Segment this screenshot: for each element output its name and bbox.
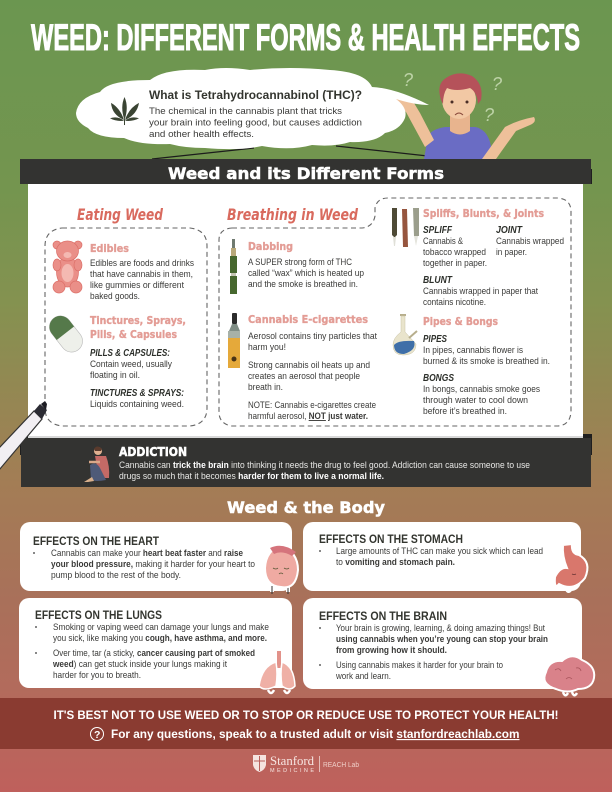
text: pipes and bongs: In pipes, cannabis flower is bbox=[423, 344, 523, 355]
card: effects on the lungs: harder for you to breath. bbox=[53, 669, 141, 680]
text: dabbing and e-cigarettes: Cannabis E-cigarettes bbox=[248, 313, 368, 326]
text: dabbing and e-cigarettes: called “wax” which is heated up bbox=[248, 267, 364, 278]
heading: eating weed: Eating Weed bbox=[77, 205, 163, 224]
text: spliffs, blunts, joints: tobacco wrapped bbox=[423, 246, 486, 257]
icon: sad seated person bbox=[84, 446, 109, 482]
header bar: weed and its different forms bbox=[20, 159, 591, 184]
text: pipes and bongs: Pipes & Bongs bbox=[423, 315, 498, 328]
card: effects on the stomach bbox=[303, 522, 581, 591]
text: spliffs, blunts, joints: Spliffs, Blunts, & Joints bbox=[423, 207, 544, 220]
text: pipes and bongs: through water to cool down bbox=[423, 394, 528, 405]
heading: weed and the body: Weed & the Body bbox=[227, 498, 386, 517]
card: effects on the heart: Cannabis can make your heart beat faster and raise bbox=[51, 547, 243, 558]
card: effects on the brain: Using cannabis makes it harder for your brain to bbox=[336, 659, 503, 670]
card: effects on the brain: from growing how it should. bbox=[336, 644, 447, 655]
text: eating weed: that have cannabis in them, bbox=[90, 268, 193, 279]
footer message bbox=[54, 710, 558, 741]
text: spliffs, blunts, joints: contains nicotine. bbox=[423, 296, 486, 307]
icon: sad stomach bbox=[555, 544, 587, 592]
icon: marker pen bbox=[0, 401, 47, 476]
text: spliffs, blunts, joints bbox=[423, 207, 564, 307]
text: dabbing and e-cigarettes: Strong cannabis oil heats up and bbox=[248, 359, 370, 370]
text: pipes and bongs: before it’s breathed in. bbox=[423, 405, 507, 416]
text: spliffs, blunts, joints: Cannabis wrapped in paper that bbox=[423, 285, 538, 296]
logo: stanford medicine reach lab: Stanford bbox=[270, 754, 315, 768]
footer message: For any questions, speak to a trusted adult or visit stanfordreachlab.com bbox=[111, 729, 520, 741]
text: pipes and bongs bbox=[423, 315, 550, 416]
card: effects on the brain bbox=[303, 598, 582, 689]
card: effects on the brain: Your brain is growing, learning, & doing amazing things! But bbox=[336, 622, 545, 633]
addiction bar: drugs so much that it becomes harder for them to live a normal life. bbox=[119, 470, 384, 481]
illustration: confused person: ? bbox=[492, 74, 502, 94]
addiction bar: ADDICTION bbox=[119, 445, 187, 459]
text: spliffs, blunts, joints: JOINT bbox=[496, 225, 523, 236]
text: eating weed: like gummies or different bbox=[90, 279, 184, 290]
illustration: confused person: ? bbox=[484, 105, 494, 125]
text: eating weed: Contain weed, usually bbox=[90, 358, 172, 369]
heading: breathing in weed: Breathing in Weed bbox=[227, 205, 358, 224]
icon: sad brain bbox=[544, 656, 594, 695]
icon: question circle bbox=[90, 728, 104, 741]
dashed box: breathing in weed bbox=[219, 198, 571, 426]
icon: pill capsule bbox=[45, 311, 87, 357]
text: pipes and bongs: PIPES bbox=[423, 334, 447, 345]
text: spliffs, blunts, joints: together in paper. bbox=[423, 257, 487, 268]
icon: bong bbox=[393, 314, 417, 355]
speech cloud bbox=[76, 68, 429, 149]
text: eating weed bbox=[90, 242, 194, 409]
icon: sad heart bbox=[265, 546, 298, 594]
card: effects on the lungs: EFFECTS ON THE LUNGS bbox=[35, 610, 162, 622]
text: eating weed: PILLS & CAPSULES: bbox=[90, 348, 170, 359]
card: effects on the brain: EFFECTS ON THE BRAIN bbox=[319, 611, 447, 623]
cloud text: what is THC bbox=[149, 88, 362, 139]
text: dabbing and e-cigarettes bbox=[248, 240, 377, 421]
text: dabbing and e-cigarettes: NOTE: Cannabis e-cigarettes create bbox=[248, 399, 376, 410]
icon: question circle: ? bbox=[94, 729, 100, 741]
card: effects on the stomach: to vomiting and stomach pain. bbox=[336, 556, 455, 567]
text: spliffs, blunts, joints: Cannabis & bbox=[423, 235, 464, 246]
text: eating weed: Edibles bbox=[90, 242, 129, 255]
text: spliffs, blunts, joints: in paper. bbox=[496, 246, 527, 257]
card: effects on the stomach: EFFECTS ON THE STOMACH bbox=[319, 534, 463, 546]
text: eating weed: Pills, & Capsules bbox=[90, 328, 177, 341]
text: eating weed: Liquids containing weed. bbox=[90, 398, 184, 409]
projector strings bbox=[152, 146, 455, 159]
card: effects on the brain: work and learn. bbox=[335, 670, 391, 681]
text: dabbing and e-cigarettes: A SUPER strong form of THC bbox=[248, 256, 352, 267]
card: effects on the lungs: Smoking or vaping weed can damage your lungs and make bbox=[53, 621, 269, 632]
text: spliffs, blunts, joints: BLUNT bbox=[423, 275, 453, 286]
cloud text: what is THC: The chemical in the cannabis plant that tricks bbox=[149, 105, 342, 116]
text: spliffs, blunts, joints: Cannabis wrapped bbox=[496, 235, 564, 246]
text: dabbing and e-cigarettes: harm you! bbox=[248, 341, 286, 352]
card: effects on the brain: using cannabis when you’re young can stop your brain bbox=[336, 633, 548, 644]
text: spliffs, blunts, joints: SPLIFF bbox=[423, 225, 453, 236]
text: eating weed: TINCTURES & SPRAYS: bbox=[90, 388, 184, 399]
cloud text: what is THC: your brain into feeling good, but causes addiction bbox=[149, 116, 362, 128]
icon: cannabis leaf bbox=[110, 97, 139, 125]
text: dabbing and e-cigarettes: Dabbing bbox=[248, 240, 293, 253]
icon: spliff, blunt, joint bbox=[392, 208, 419, 247]
text: dabbing and e-cigarettes: breath in. bbox=[248, 381, 283, 392]
icon: e-cigarette bbox=[228, 313, 240, 368]
card: effects on the heart: EFFECTS ON THE HEART bbox=[33, 536, 159, 548]
text: dabbing and e-cigarettes: Aerosol contains tiny particles that bbox=[248, 330, 377, 341]
addiction bar bbox=[21, 438, 591, 487]
header bar: weed and its different forms: Weed and its Different Forms bbox=[168, 164, 444, 183]
card: effects on the heart: your blood pressure, making it harder for your heart to bbox=[51, 558, 255, 569]
card: effects on the lungs: weed) can get stuck inside your lungs making it bbox=[52, 658, 227, 669]
logo: stanford medicine reach lab: MEDICINE bbox=[270, 768, 314, 774]
text: eating weed: floating in oil. bbox=[90, 369, 140, 380]
logo: stanford medicine reach lab: REACH Lab bbox=[323, 760, 359, 769]
card: effects on the heart bbox=[20, 522, 292, 591]
logo: stanford medicine reach lab bbox=[253, 754, 359, 774]
text: pipes and bongs: BONGS bbox=[423, 373, 454, 384]
footer message: IT'S BEST NOT TO USE WEED OR TO STOP OR REDUCE USE TO PROTECT YOUR HEALTH! bbox=[54, 710, 558, 722]
text: pipes and bongs: In bongs, cannabis smoke goes bbox=[423, 383, 540, 394]
icon: gummy bear bbox=[53, 241, 82, 293]
addiction bar: Cannabis can trick the brain into thinking it needs the drug to feel good. Addiction can cause someone to use bbox=[119, 459, 530, 470]
text: eating weed: Edibles are foods and drinks bbox=[90, 257, 194, 268]
cloud text: what is THC: and other health effects. bbox=[149, 128, 254, 139]
card: effects on the lungs: Over time, tar (a sticky, cancer causing part of smoked bbox=[53, 647, 255, 658]
icon: sad lungs bbox=[259, 651, 295, 693]
card: effects on the lungs: you sick, like making you cough, have asthma, and more. bbox=[53, 632, 267, 643]
text: dabbing and e-cigarettes: creates an aerosol that people bbox=[248, 370, 360, 381]
card: effects on the heart: pump blood to the rest of the body. bbox=[51, 569, 181, 580]
header bar tabs bbox=[20, 169, 592, 455]
illustration: confused person: ? bbox=[403, 70, 413, 90]
text: dabbing and e-cigarettes: and the smoke is breathed in. bbox=[248, 278, 358, 289]
cloud text: what is THC: What is Tetrahydrocannabinol (THC)? bbox=[149, 88, 362, 102]
text: pipes and bongs: burned & its smoke is breathed in. bbox=[423, 355, 550, 366]
text: eating weed: baked goods. bbox=[90, 290, 140, 301]
card: effects on the stomach: Large amounts of THC can make you sick which can lead bbox=[336, 545, 543, 556]
icon: dab pen bbox=[230, 239, 237, 294]
illustration: confused person bbox=[392, 70, 535, 159]
text: eating weed: Tinctures, Sprays, bbox=[90, 314, 186, 327]
dashed box: eating weed bbox=[45, 228, 207, 426]
card: effects on the lungs bbox=[19, 598, 292, 688]
footer band bbox=[0, 698, 612, 749]
text: dabbing and e-cigarettes: harmful aerosol, NOT just water. bbox=[248, 410, 368, 421]
panel: different forms bbox=[28, 182, 583, 438]
